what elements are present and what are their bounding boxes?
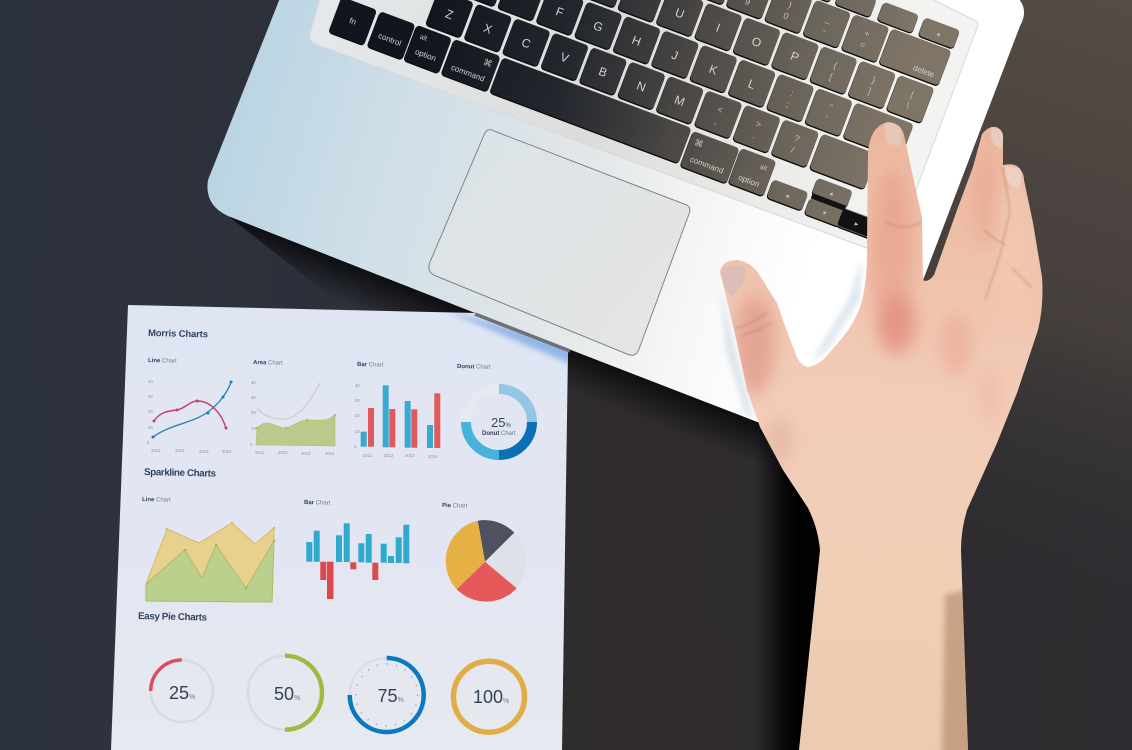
key labels: ' xyxy=(824,114,829,124)
chart: sparkline area chart xyxy=(146,522,275,602)
key labels: P xyxy=(789,49,801,65)
key labels: Z xyxy=(443,7,455,22)
chart: morris bar chart: 40 xyxy=(355,383,360,388)
heading: Easy Pie Charts: Easy Pie Charts xyxy=(138,611,208,624)
soft hand shadow on laptop xyxy=(720,258,862,418)
keyboard tray xyxy=(310,0,978,262)
chart: morris line chart xyxy=(147,379,232,454)
arrow key dark details xyxy=(805,193,878,238)
key labels: option xyxy=(737,173,761,189)
chart: morris area chart: 30 xyxy=(251,395,256,400)
chart: morris line chart: 20 xyxy=(148,409,153,414)
chart: pie chart xyxy=(446,520,526,602)
key labels: { xyxy=(832,60,839,71)
key labels: N xyxy=(635,78,648,95)
key labels: delete xyxy=(912,63,936,80)
key labels: : xyxy=(789,88,795,98)
chart: morris bar chart: 20 xyxy=(355,413,360,418)
key labels: option xyxy=(414,47,437,63)
hand xyxy=(720,122,1042,750)
key labels: | xyxy=(909,89,915,99)
key labels: / xyxy=(790,145,796,155)
chart: donut chart 25%: Donut Chart xyxy=(482,431,516,437)
key labels: alt xyxy=(759,164,768,173)
keyboard keys xyxy=(330,0,960,238)
key labels: C xyxy=(520,35,533,51)
key labels: K xyxy=(707,62,719,78)
panel: printed paper with charts xyxy=(111,305,575,750)
chart: morris bar chart: 2013 xyxy=(405,453,415,458)
label: sparkline Line Chart: Line Chart xyxy=(142,497,171,504)
laptop hinge edge over paper xyxy=(475,314,570,351)
chart: morris bar chart: 10 xyxy=(355,429,360,434)
label: Area Chart: Area Chart xyxy=(253,360,283,367)
label: Donut Chart: Donut Chart xyxy=(457,364,491,371)
shadow of hand on desk xyxy=(750,400,835,750)
key labels: J xyxy=(670,48,680,63)
key edge shadows xyxy=(328,0,959,242)
label: sparkline Bar Chart: Bar Chart xyxy=(304,500,331,507)
chart: morris area chart xyxy=(250,380,336,456)
reddened fingers and knuckles xyxy=(735,150,1035,464)
key labels: I xyxy=(714,21,722,35)
chart: sparkline bar chart xyxy=(306,523,409,599)
chart: easy pie 25% xyxy=(151,660,213,722)
chart: morris area chart: 2014 xyxy=(325,451,335,456)
key labels: _ xyxy=(824,13,834,25)
key labels: ▲ xyxy=(828,190,835,198)
laptop xyxy=(207,0,1024,460)
heading: Sparkline Charts: Sparkline Charts xyxy=(144,467,217,480)
chart: morris bar chart: 2012 xyxy=(384,453,394,458)
chart: easy pie 50% xyxy=(248,656,322,730)
key labels: control xyxy=(377,31,403,48)
chart: morris line chart: 2013 xyxy=(199,449,209,454)
key labels: > xyxy=(754,119,763,130)
trackpad xyxy=(429,130,690,355)
chart: morris bar chart: 30 xyxy=(355,398,360,403)
thumb nail xyxy=(721,265,745,296)
laptop shadow on desk xyxy=(228,216,860,496)
chart: easy pie 75%: 75% xyxy=(378,686,404,706)
chart: easy pie 100% xyxy=(454,661,524,732)
key labels: + xyxy=(863,28,871,39)
key labels: ▲ xyxy=(935,31,942,39)
laptop body xyxy=(207,0,1024,460)
key labels: B xyxy=(597,64,609,80)
chart: morris bar chart xyxy=(354,383,440,459)
chart: morris area chart: 20 xyxy=(251,410,256,415)
chart: morris line chart: 2014 xyxy=(222,449,232,454)
chart: morris bar chart: 0 xyxy=(354,444,357,449)
chart: donut chart 25% xyxy=(466,389,532,455)
chart: morris line chart: 2011 xyxy=(151,448,161,453)
index finger nail xyxy=(885,122,901,145)
chart: morris line chart: 30 xyxy=(148,394,153,399)
chart: morris line chart: 0 xyxy=(147,440,150,445)
key labels: fn xyxy=(348,16,357,27)
key labels: 0 xyxy=(782,10,790,22)
key labels: G xyxy=(591,18,605,35)
chart: morris line chart: 10 xyxy=(148,425,153,430)
key labels: alt xyxy=(419,34,428,43)
chart: morris bar chart: 2014 xyxy=(428,454,438,459)
ring finger nail xyxy=(1005,166,1021,189)
warm light on the desk at upper right xyxy=(780,0,1132,620)
key labels: X xyxy=(482,21,494,37)
chart: morris area chart: 2013 xyxy=(301,451,311,456)
knuckle creases xyxy=(736,168,1032,336)
chart: morris area chart: 0 xyxy=(250,442,253,447)
key labels: ? xyxy=(793,133,801,144)
chart: morris line chart: 40 xyxy=(148,379,153,384)
key labels xyxy=(343,0,949,236)
key labels: V xyxy=(558,50,571,66)
chart: morris line chart: 2012 xyxy=(175,448,185,453)
key labels: \ xyxy=(905,100,911,111)
label: Line Chart: Line Chart xyxy=(148,358,177,365)
key labels: H xyxy=(630,33,643,49)
hand base skin xyxy=(720,122,1042,750)
key labels: command xyxy=(689,155,725,175)
chart: easy pie 50%: 50% xyxy=(274,684,300,704)
key labels: F xyxy=(554,4,566,20)
middle finger nail xyxy=(991,127,1003,149)
chart: easy pie 100%: 100% xyxy=(473,687,509,707)
key labels: ⌘ xyxy=(693,137,705,150)
label: Pie Chart: Pie Chart xyxy=(442,503,468,510)
chart: morris area chart: 10 xyxy=(251,426,256,431)
key labels: M xyxy=(673,93,687,109)
key labels: ▼ xyxy=(820,210,828,218)
key labels: command xyxy=(450,63,486,84)
key labels: [ xyxy=(828,72,835,82)
key labels: U xyxy=(673,5,686,21)
key labels: . xyxy=(751,130,757,141)
key labels: ► xyxy=(852,221,860,229)
key labels: } xyxy=(871,75,877,85)
key labels: O xyxy=(750,34,763,50)
chart: morris area chart: 2012 xyxy=(278,450,288,455)
key labels: = xyxy=(859,39,867,50)
key labels: ; xyxy=(785,99,791,109)
wrist hair shading xyxy=(942,590,974,750)
blue shadow from laptop on the paper xyxy=(450,312,568,366)
chart: morris area chart: 40 xyxy=(251,380,256,385)
chart: morris area chart: 2011 xyxy=(255,450,265,455)
key labels: " xyxy=(827,102,834,113)
label: Bar Chart: Bar Chart xyxy=(357,362,384,369)
heading: Morris Charts: Morris Charts xyxy=(148,328,208,340)
key labels: ◄ xyxy=(783,193,791,201)
key labels: , xyxy=(713,116,719,126)
key labels: ] xyxy=(867,86,872,96)
chart: donut chart 25%: 25% xyxy=(491,415,511,430)
chart: easy pie 75% xyxy=(350,658,424,732)
chart: morris bar chart: 2011 xyxy=(363,453,373,458)
chart: easy pie 25%: 25% xyxy=(169,683,195,703)
key labels: - xyxy=(821,25,828,36)
key labels: L xyxy=(746,76,758,92)
key labels: ⌘ xyxy=(482,57,494,69)
key labels: < xyxy=(716,104,724,115)
